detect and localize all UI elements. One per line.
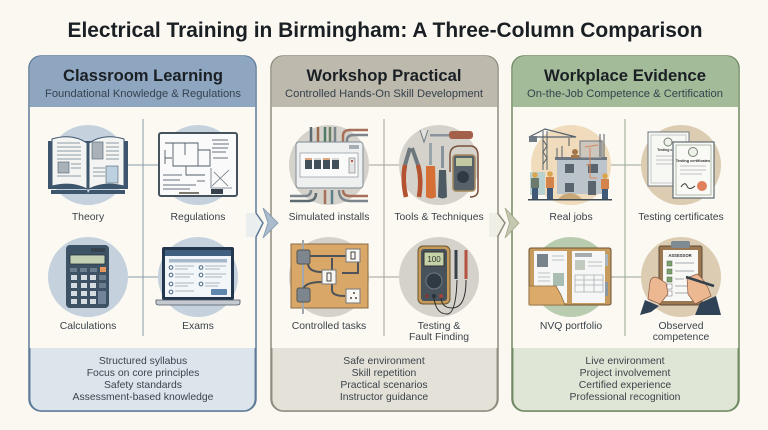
workshop summary: Skill repetition	[352, 368, 417, 379]
icon: construction site	[528, 125, 612, 205]
label: calculations: Calculations	[60, 321, 116, 332]
classroom summary: Assessment-based knowledge	[73, 392, 214, 403]
icon: hand tools	[399, 125, 479, 205]
classroom summary: Structured syllabus	[99, 356, 187, 367]
arrow: workshop to workplace	[489, 208, 519, 238]
workplace summary	[513, 348, 738, 411]
icon: multimeter: 100	[427, 255, 441, 264]
workshop header: Workshop Practical	[306, 67, 462, 85]
classroom summary	[30, 348, 255, 411]
label: observed competence	[653, 321, 710, 343]
icon: multimeter	[399, 237, 479, 317]
icon: consumer unit	[289, 125, 369, 205]
icon: wiring board	[289, 237, 369, 317]
workshop header: Controlled Hands-On Skill Development	[285, 88, 484, 100]
workshop summary	[272, 348, 497, 411]
workshop summary: Practical scenarios	[340, 380, 428, 391]
workplace summary: Live environment	[585, 356, 665, 367]
icon: assessor clipboard	[640, 237, 721, 317]
label: exams: Exams	[182, 321, 214, 332]
workplace header: On-the-Job Competence & Certification	[527, 88, 723, 100]
icon: assessor clipboard: ASSESSOR	[668, 253, 692, 258]
classroom summary: Focus on core principles	[87, 368, 199, 379]
workplace summary: Project involvement	[580, 368, 670, 379]
classroom summary: Safety standards	[104, 380, 182, 391]
panel: workshop practical	[271, 56, 498, 411]
icon: testing certificates	[641, 125, 721, 205]
label: testing certificates: Testing certificates	[638, 212, 724, 223]
icon: portfolio	[529, 237, 611, 317]
workplace summary: Certified experience	[579, 380, 671, 391]
icon: calculator	[48, 237, 128, 317]
workplace header: Workplace Evidence	[544, 67, 706, 85]
label: observed competence: competence	[653, 332, 710, 343]
label: testing and fault finding: Testing &	[418, 321, 460, 332]
label: regulations: Regulations	[171, 212, 225, 223]
label: testing and fault finding: Fault Finding	[409, 332, 469, 343]
panel: classroom learning	[29, 56, 256, 411]
workplace summary: Professional recognition	[570, 392, 681, 403]
classroom header: Classroom Learning	[63, 67, 223, 85]
classroom header: Foundational Knowledge & Regulations	[45, 88, 241, 100]
title: Electrical Training in Birmingham: A Three-Column Comparison	[68, 19, 702, 42]
label: real jobs: Real jobs	[549, 212, 593, 223]
icon: testing certificates: Testing certif	[657, 148, 680, 152]
icon: testing certificates: Testing certificates	[676, 159, 710, 163]
label: controlled tasks: Controlled tasks	[292, 321, 366, 332]
workshop summary: Instructor guidance	[340, 392, 428, 403]
icon: whiteboard	[158, 125, 238, 205]
label: tools and techniques: Tools & Techniques	[394, 212, 484, 223]
arrow: classroom to workshop	[246, 208, 278, 238]
label: observed competence: Observed	[658, 321, 704, 332]
classroom header	[30, 56, 255, 107]
workshop summary: Safe environment	[343, 356, 425, 367]
workshop header	[272, 56, 497, 107]
icon: laptop exam	[156, 237, 240, 317]
icon: open book	[48, 125, 128, 205]
label: theory: Theory	[72, 212, 105, 223]
workplace header	[513, 56, 738, 107]
label: simulated installs: Simulated installs	[289, 212, 369, 223]
panel: workplace evidence	[512, 56, 739, 411]
label: testing and fault finding	[409, 321, 469, 343]
label: nvq portfolio: NVQ portfolio	[540, 321, 602, 332]
